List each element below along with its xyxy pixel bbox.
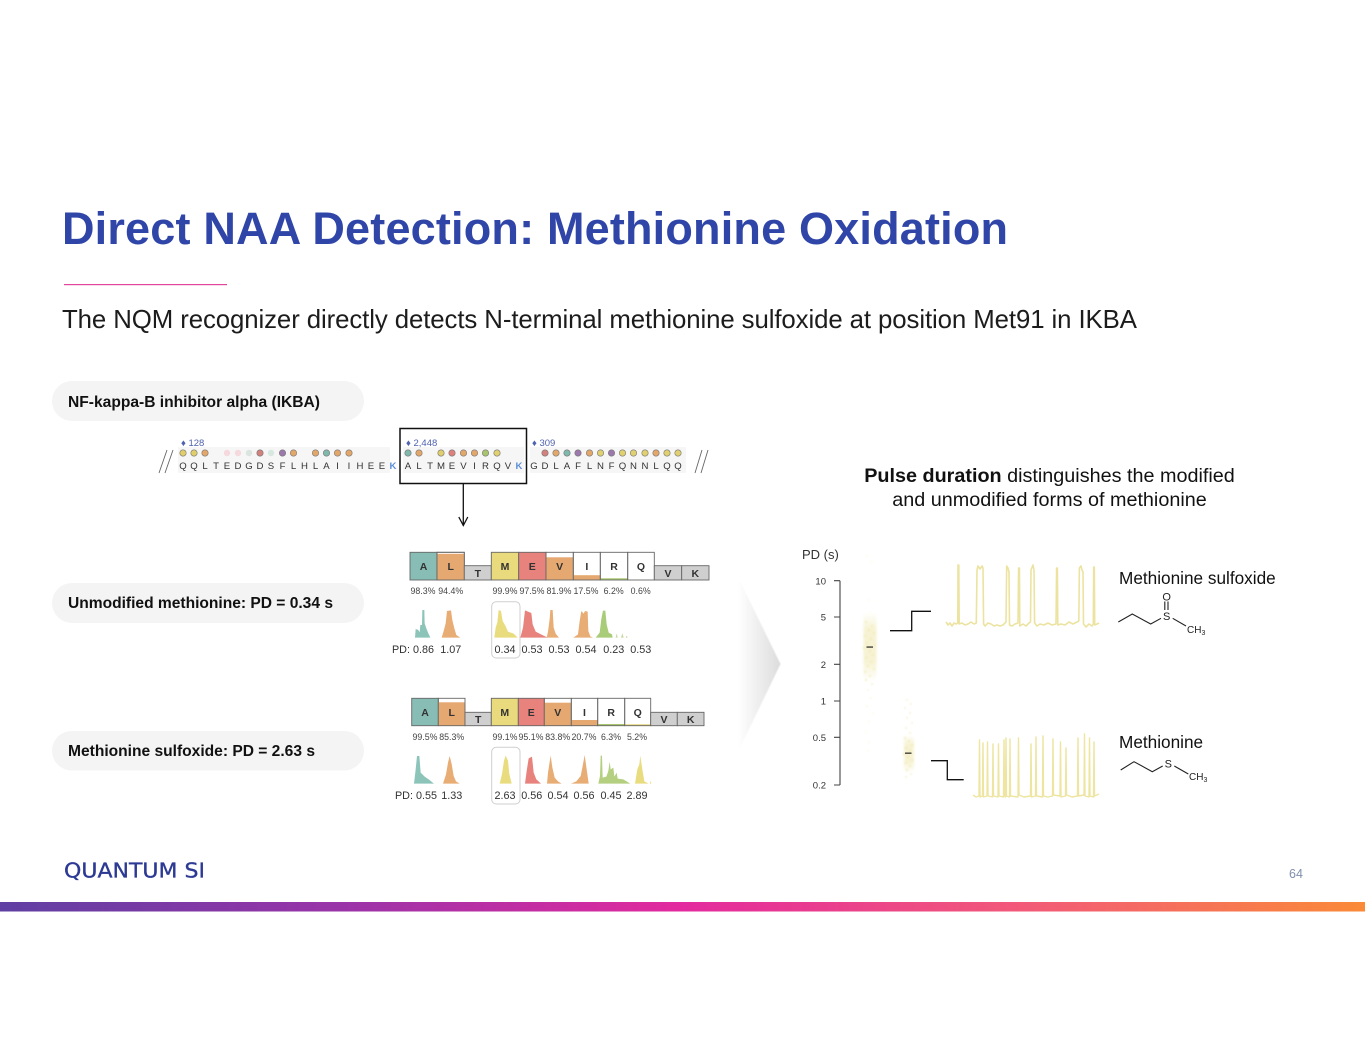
structure: methionine bbox=[1121, 758, 1207, 784]
footer gradient bar bbox=[0, 902, 1365, 912]
sequence segment three: ♦ 309 bbox=[532, 438, 555, 449]
pulse duration values row two: PD: 0.55 bbox=[395, 790, 437, 802]
swarm: methionine bbox=[902, 699, 914, 778]
residue letters row two: ALMEVIRQ bbox=[421, 707, 642, 719]
percent labels row two: 20.7% bbox=[572, 732, 597, 742]
percent labels row one: 81.9% bbox=[547, 586, 572, 596]
pulse duration values row two: 1.33 bbox=[441, 790, 462, 802]
residue boxes row two bbox=[412, 698, 704, 726]
structure: methionine sulfoxide: S bbox=[1163, 611, 1170, 623]
percent labels row one: 94.4% bbox=[438, 586, 463, 596]
title accent rule bbox=[64, 284, 227, 285]
percent labels row one: 99.9% bbox=[493, 586, 518, 596]
step icon: down bbox=[931, 761, 964, 780]
page number: 64 bbox=[1289, 867, 1303, 881]
percent labels row two: 99.1% bbox=[493, 732, 518, 742]
pulse duration scatter chart bbox=[802, 547, 914, 792]
pulse duration values row two: 2.89 bbox=[626, 790, 648, 802]
title: Direct NAA Detection: Methionine Oxidation bbox=[62, 203, 1008, 254]
sequence segment two bbox=[405, 438, 523, 472]
right panel heading second line: and unmodified forms of methionine bbox=[892, 489, 1207, 511]
structure: methionine sulfoxide: CH bbox=[1187, 625, 1201, 636]
tick labels: 1 bbox=[821, 696, 826, 708]
percent labels row one: 0.6% bbox=[631, 586, 651, 596]
pulse duration values row two: 0.54 bbox=[547, 790, 569, 802]
pulse duration values row one: 1.07 bbox=[440, 644, 461, 656]
percent labels row one: 98.3% bbox=[411, 586, 436, 596]
pulse duration values row one: 0.23 bbox=[603, 644, 624, 656]
signal trace: methionine sulfoxide bbox=[946, 565, 1099, 627]
pulse duration values row two: 0.45 bbox=[600, 790, 622, 802]
tick labels: 0.2 bbox=[813, 780, 826, 792]
sequence segment two: ALTMEVIRQV bbox=[405, 461, 512, 472]
pulse duration values row one: 0.53 bbox=[548, 644, 570, 656]
highlight box around peptide bbox=[400, 428, 526, 484]
sequence segment three: GDLAFLNFQNNLQQ bbox=[530, 461, 682, 472]
right panel heading: Pulse duration distinguishes the modified bbox=[864, 465, 1235, 487]
recognition panel: unmodified methionine bbox=[392, 552, 709, 658]
pulse duration values row two: 2.63 bbox=[494, 790, 516, 802]
residue boxes row one bbox=[410, 552, 709, 580]
tick labels: 5 bbox=[821, 612, 826, 624]
percent labels row two: 6.3% bbox=[601, 732, 621, 742]
sequence segment three bbox=[530, 438, 682, 472]
step icon: up bbox=[890, 611, 931, 631]
structure: methionine: CH bbox=[1189, 772, 1203, 783]
sequence segment two: K bbox=[516, 461, 523, 472]
structure: methionine sulfoxide bbox=[1118, 592, 1205, 637]
methionine highlight row one bbox=[492, 602, 520, 658]
residue letters row one: ALMEVIRQ bbox=[420, 561, 645, 573]
pulse duration values row two: 0.56 bbox=[573, 790, 595, 802]
percent labels row two: 95.1% bbox=[519, 732, 544, 742]
percent labels row one: 6.2% bbox=[604, 586, 624, 596]
label: methionine sulfoxide structure: Methionine sulfoxide bbox=[1119, 568, 1276, 588]
recognition panel: methionine sulfoxide bbox=[395, 698, 704, 804]
label: methionine sulfoxide structure bbox=[1118, 568, 1276, 637]
pulse duration values row one: 0.53 bbox=[630, 644, 651, 656]
pulse duration values row one: 0.54 bbox=[575, 644, 597, 656]
pulse duration values row one: PD: 0.86 bbox=[392, 644, 434, 656]
axis title: PD (s) bbox=[802, 547, 839, 562]
arrow: peptide to recognition traces bbox=[459, 484, 468, 526]
sequence segment one: QQLTEDGDSFLHLAIIHEE bbox=[179, 461, 385, 472]
percent labels row two: 85.3% bbox=[439, 732, 464, 742]
pulse duration values row one: 0.34 bbox=[494, 644, 516, 656]
sequence segment one bbox=[179, 438, 397, 472]
structure: methionine sulfoxide: O bbox=[1162, 592, 1171, 604]
sequence segment two: ♦ 2,448 bbox=[406, 438, 437, 449]
sequence segment one: ♦ 128 bbox=[181, 438, 204, 449]
structure: methionine: 3 bbox=[1203, 777, 1207, 784]
label pill: unmodified methionine: Unmodified methionine: PD = 0.34 s bbox=[68, 595, 333, 612]
label pill: unmodified methionine bbox=[52, 583, 364, 623]
percent labels row two: 5.2% bbox=[627, 732, 647, 742]
tick labels: 2 bbox=[821, 660, 826, 671]
chevron arrow between panels bbox=[738, 577, 780, 752]
percent labels row one: 97.5% bbox=[520, 586, 545, 596]
peptide sequence panel bbox=[159, 438, 708, 473]
pulse duration values row one: 0.53 bbox=[521, 644, 543, 656]
tick labels: 10 bbox=[815, 576, 826, 588]
percent labels row one: 17.5% bbox=[574, 586, 599, 596]
grey residue letters row one: TVK bbox=[475, 568, 700, 580]
subtitle: The NQM recognizer directly detects N-terminal methionine sulfoxide at position Met91 in IKBA bbox=[62, 306, 1138, 334]
signal trace: methionine bbox=[973, 734, 1099, 797]
logo: Quantum-Si: QUANTUM SI bbox=[64, 858, 205, 882]
label pill: methionine sulfoxide: Methionine sulfoxide: PD = 2.63 s bbox=[68, 743, 315, 760]
percent labels row two: 83.8% bbox=[545, 732, 570, 742]
grey residue letters row two: TVK bbox=[475, 714, 695, 726]
label: methionine structure: Methionine bbox=[1119, 732, 1203, 752]
tick labels: 0.5 bbox=[813, 733, 826, 744]
structure: methionine sulfoxide: 3 bbox=[1201, 630, 1205, 637]
label: methionine structure bbox=[1119, 732, 1207, 784]
sequence segment one: K bbox=[390, 461, 397, 472]
pulse duration values row two: 0.56 bbox=[521, 790, 542, 802]
pulse duration histograms row two bbox=[414, 755, 651, 784]
methionine highlight row two bbox=[492, 747, 520, 804]
axis line and ticks bbox=[834, 581, 840, 785]
label pill: methionine sulfoxide bbox=[52, 731, 364, 770]
label pill: IKBA bbox=[52, 381, 364, 421]
structure: methionine: S bbox=[1165, 758, 1172, 770]
label pill: IKBA: NF-kappa-B inhibitor alpha (IKBA) bbox=[68, 394, 320, 411]
percent labels row two: 99.5% bbox=[413, 732, 438, 742]
swarm: methionine sulfoxide bbox=[862, 555, 876, 752]
pulse duration histograms row one bbox=[415, 610, 628, 638]
